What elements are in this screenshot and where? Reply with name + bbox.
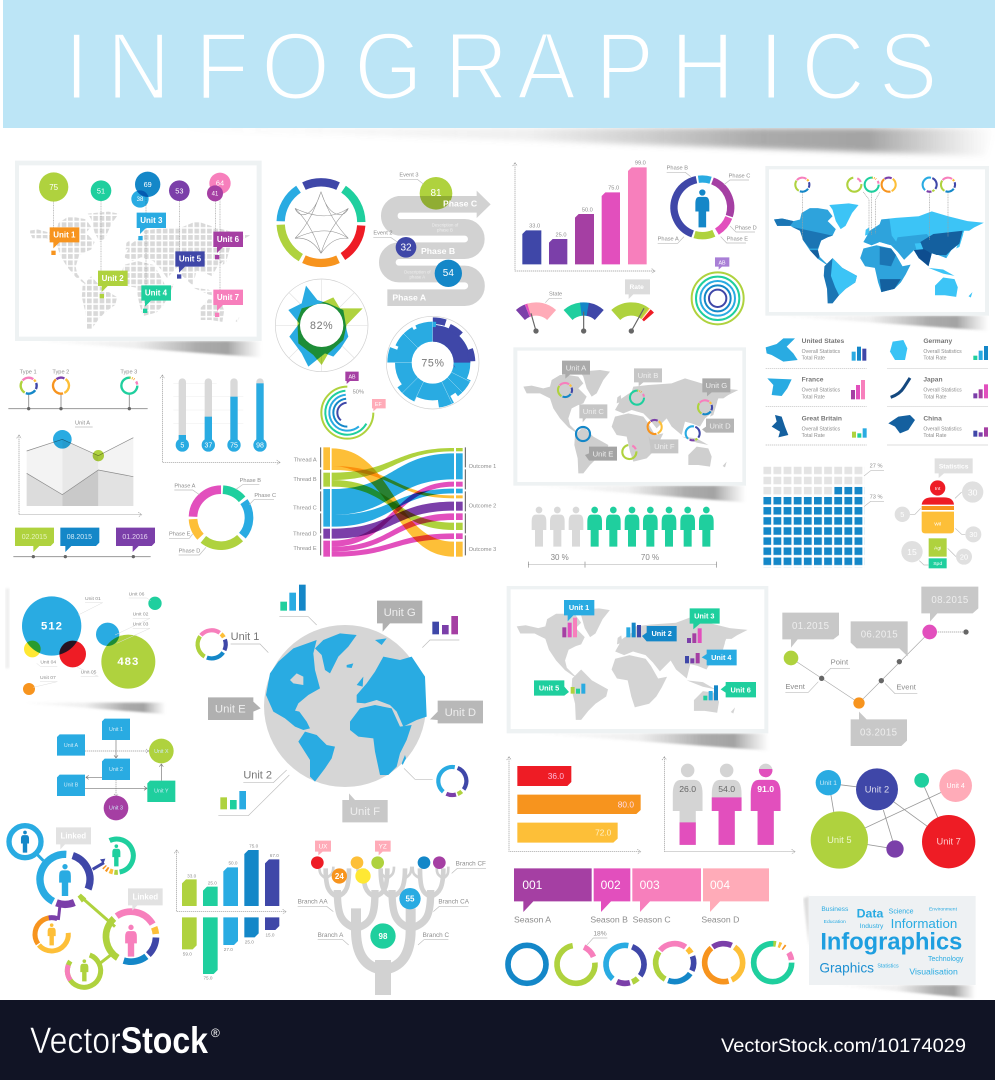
- chart: horizontal bars: [507, 757, 641, 854]
- footer bar: [0, 1000, 995, 1080]
- panel: dotted world map: 53: [175, 186, 183, 195]
- timeline: date path: 08.2015: [931, 595, 969, 606]
- diagram: branching tree: 55: [406, 895, 415, 904]
- chart: seasons: Season D: [701, 914, 739, 924]
- chart: overlapping bubbles: Unit 02: [133, 612, 149, 618]
- chart: sankey flows: Outcome 3: [469, 547, 496, 553]
- timeline: date path: 01.2015: [792, 621, 829, 632]
- chart: sankey flows: Thread B: [293, 477, 317, 483]
- panel: word cloud: Technology: [928, 956, 964, 963]
- panel: gray world map with units: Unit G: [705, 381, 727, 390]
- chart: phase cycle ring: Phase D: [179, 548, 200, 554]
- panel: country statistics: Total Rate: [802, 356, 825, 362]
- chart: person donut: Phase E: [727, 236, 748, 242]
- diagram: network bubbles: Unit 4: [947, 783, 965, 790]
- callout: Unit D: [430, 701, 483, 723]
- chart: diverging bars: [174, 844, 286, 981]
- panel: country statistics: Great Britain: [802, 415, 842, 422]
- panel: country statistics: Overall Statistics: [802, 349, 840, 355]
- chart: phase cycle ring: Phase E: [169, 532, 191, 538]
- chart: donut rings: [508, 930, 799, 991]
- chart: horizontal bars: 72.0: [595, 828, 612, 838]
- callout: Unit 7: [213, 290, 243, 317]
- chart: people bars: [662, 757, 795, 854]
- timeline: date path: Event: [785, 682, 806, 691]
- chart: phase serpentine: phase B: [437, 228, 453, 233]
- chart: statistics person: Spd: [933, 561, 942, 567]
- chart: person donut: Phase C: [729, 173, 750, 179]
- panel: country statistics: United States: [802, 338, 844, 345]
- chart: phase serpentine: 54: [443, 268, 454, 279]
- panel: word cloud: Information: [891, 916, 957, 931]
- chart: overlapping bubbles: Unit 06: [129, 591, 145, 597]
- timeline: types: Type 3: [120, 370, 137, 376]
- chart: overlapping bubbles: [5, 588, 166, 714]
- panel: world map with bar charts: Unit 5: [539, 684, 559, 693]
- panel: word cloud: Industry: [860, 923, 884, 930]
- panel: country statistics: Total Rate: [923, 356, 947, 362]
- chart: area: [17, 420, 142, 517]
- chart: sankey flows: Thread E: [293, 546, 317, 552]
- chart: statistics person: 30: [968, 487, 978, 497]
- chart: diverging bars: 67.0: [270, 853, 279, 858]
- panel: country statistics: Overall Statistics: [802, 426, 840, 432]
- callout: Unit 5: Unit 5: [179, 255, 202, 264]
- panel: blue world map: [765, 166, 989, 331]
- timeline: types: Type 2: [52, 370, 69, 376]
- chart: rising bars: 25.0: [555, 232, 567, 238]
- chart: chord ring: [265, 167, 377, 279]
- chart: gauges: [503, 279, 664, 365]
- footer link: VectorStock.com/10174029: [721, 1036, 966, 1057]
- diagram: network bubbles: [811, 768, 975, 869]
- panel: country statistics: [766, 338, 988, 445]
- chart: phase cycle ring: Phase A: [174, 483, 196, 489]
- callout: Unit 3: Unit 3: [140, 216, 163, 225]
- title banner: [3, 0, 995, 156]
- chart: seasons: 001: [522, 878, 543, 892]
- panel: gray world map with units: Unit F: [654, 442, 675, 451]
- globe: [192, 585, 483, 822]
- panel: gray world map with units: [513, 347, 746, 502]
- chart: diverging bars: 75.0: [249, 844, 259, 849]
- chart: seasons: Season B: [590, 914, 628, 924]
- chart: sankey flows: Thread A: [294, 457, 317, 463]
- chart: seasons: 003: [640, 878, 660, 892]
- timeline: dates: 08.2015: [67, 534, 92, 541]
- panel: dotted world map: 38: [137, 197, 144, 203]
- chart: people 30 / 70 percent: 70 %: [641, 553, 659, 562]
- chart: overlapping bubbles: 512: [41, 620, 63, 632]
- chart: sankey flows: [293, 447, 496, 557]
- panel: world map with bar charts: [507, 586, 769, 751]
- panel: country statistics: China: [923, 415, 942, 422]
- callout: Unit 2: Unit 2: [102, 274, 124, 283]
- panel: gray world map with units: Unit A: [566, 363, 587, 372]
- chart: diverging bars: 59.0: [183, 951, 192, 956]
- chart: statistics person: Agi: [934, 546, 941, 552]
- panel: word cloud: Environment: [929, 906, 958, 912]
- lower right quadrant: [507, 586, 978, 999]
- chart: overlapping bubbles: Unit 05: [81, 670, 97, 676]
- diagram: linked people: Linked: [60, 832, 86, 841]
- callout: Unit D: Unit D: [445, 707, 476, 719]
- callout: Unit 1: [50, 227, 79, 255]
- globe: Unit 1: [231, 631, 259, 643]
- chart: radar 82%: [275, 279, 368, 372]
- chart: people bars: 54.0: [718, 784, 735, 794]
- chart: phase serpentine: 81: [430, 188, 442, 199]
- panel: word cloud: Science: [889, 908, 914, 915]
- chart: diverging bars: 33.0: [187, 873, 197, 878]
- timeline: date path: 06.2015: [861, 630, 898, 641]
- panel: gray world map with units: Unit C: [583, 407, 604, 416]
- diagram: linked people: [9, 826, 166, 994]
- diagram: network bubbles: Unit 7: [936, 837, 961, 847]
- lower left quadrant: [5, 585, 486, 995]
- chart: overlapping bubbles: 483: [117, 656, 139, 668]
- chart: phase cycle ring: Phase B: [240, 478, 261, 484]
- diagram: network bubbles: Unit 5: [827, 835, 852, 845]
- timeline: types: Type 1: [20, 370, 37, 376]
- chart: seasons: 002: [601, 878, 621, 892]
- chart: overlapping bubbles: Unit 01: [85, 596, 101, 602]
- icon: person: [695, 189, 709, 227]
- panel: country statistics: Overall Statistics: [923, 388, 962, 394]
- chart: people 30 / 70 percent: 30 %: [551, 553, 569, 562]
- callout: Unit 7: Unit 7: [217, 293, 240, 302]
- panel: country statistics: Overall Statistics: [923, 349, 962, 355]
- callout: Unit 2: [98, 271, 128, 298]
- callout: Unit 4: Unit 4: [145, 289, 168, 298]
- upper left quadrant: [8, 161, 496, 558]
- chart: seasons: 004: [710, 878, 730, 892]
- diagram: branching tree: Branch AA: [298, 899, 328, 906]
- title: INFOGRAPHICS: [64, 13, 938, 120]
- timeline: dates: 02.2015: [22, 534, 47, 541]
- footer brand: VectorStock: [30, 1020, 208, 1061]
- chart: phase serpentine: 32: [400, 243, 412, 254]
- callout: Unit 3: [137, 213, 166, 240]
- timeline: date path: 03.2015: [860, 728, 897, 739]
- diagram: linked people: Linked: [132, 893, 158, 902]
- panel: gray world map with units: Unit E: [593, 449, 613, 458]
- chart: person donut: Phase D: [735, 225, 757, 231]
- upper right quadrant: [503, 161, 989, 568]
- chart: seasons: Season A: [514, 914, 551, 924]
- timeline: types: [8, 370, 148, 410]
- diagram: branching tree: UX: [319, 844, 328, 851]
- chart: statistics person: 5: [900, 510, 904, 519]
- callout: Unit G: [377, 601, 422, 632]
- chart: diverging bars: 75.0: [203, 976, 213, 981]
- chart: seasons: [514, 868, 769, 924]
- callout: Unit E: [208, 697, 261, 720]
- chart: statistics person: Statistics: [939, 463, 969, 470]
- panel: world map with bar charts: Unit 4: [711, 653, 732, 662]
- callout: Unit 6: [213, 232, 243, 259]
- chart: diverging bars: 15.0: [265, 932, 275, 937]
- chart: sunburst 75%: 75%: [421, 357, 445, 369]
- chart: phase cycle ring: Phase C: [254, 493, 276, 499]
- panel: country statistics: Japan: [923, 377, 943, 384]
- panel: country statistics: France: [802, 377, 824, 384]
- callout: Unit F: Unit F: [350, 806, 380, 818]
- chart: radial arcs 50%: 50%: [353, 390, 364, 396]
- chart: sankey flows: Outcome 1: [469, 464, 496, 470]
- chart: phase serpentine: Description of: [432, 223, 459, 228]
- chart: diverging bars: 50.0: [228, 861, 238, 866]
- panel: world map with bar charts: Unit 1: [569, 603, 589, 612]
- map: blue countries: [774, 203, 984, 303]
- panel: country statistics: Total Rate: [802, 433, 825, 439]
- chart: rising bars: 33.0: [529, 224, 540, 230]
- chart: statistics person: Wil: [934, 521, 941, 527]
- chart: waffle 27 / 73 percent: 27 %: [870, 464, 883, 470]
- diagram: branching tree: Branch CF: [456, 861, 486, 868]
- timeline: dates: [13, 528, 155, 558]
- chart: thermometers: 98: [256, 443, 264, 450]
- diagram: branching tree: 98: [379, 932, 388, 941]
- panel: dotted world map: 64: [216, 178, 224, 187]
- chart: radial arcs 50%: EF: [375, 402, 382, 408]
- chart: statistics person: 30: [969, 530, 977, 539]
- chart: rising bars: 75.0: [608, 186, 619, 192]
- panel: country statistics: Overall Statistics: [923, 426, 962, 432]
- panel: word cloud: [803, 896, 976, 999]
- panel: country statistics: Total Rate: [802, 394, 825, 400]
- chart: person donut: [658, 166, 757, 245]
- chart: gauges: State: [549, 292, 562, 298]
- chart: thermometers: [160, 375, 280, 465]
- timeline: date path: Event: [896, 683, 917, 692]
- panel: word cloud: Education: [824, 919, 846, 925]
- panel: world map with bar charts: Unit 2: [651, 629, 672, 638]
- chart: donut rings: 18%: [593, 930, 607, 937]
- panel: word cloud: Data: [857, 907, 884, 921]
- chart: horizontal bars: 80.0: [618, 799, 634, 809]
- panel: dotted world map: 75: [49, 183, 59, 192]
- panel: country statistics: Overall Statistics: [802, 388, 840, 394]
- panel: world map with bar charts: Unit 6: [730, 685, 751, 694]
- chart: diverging bars: 25.0: [245, 939, 254, 944]
- panel: country statistics: Germany: [923, 338, 952, 345]
- chart: gauges: Rate: [629, 284, 644, 291]
- timeline: date path: Point: [831, 658, 849, 667]
- panel: dotted world map: [15, 161, 262, 357]
- chart: sankey flows: Thread D: [293, 531, 317, 537]
- chart: phase serpentine: phase A: [410, 274, 425, 279]
- chart: waffle 27 / 73 percent: 73 %: [870, 495, 883, 501]
- chart: phase serpentine: Event 3: [399, 173, 419, 179]
- diagram: network bubbles: Unit 1: [820, 780, 837, 787]
- callout: Unit E: Unit E: [215, 704, 246, 716]
- chart: overlapping bubbles: Unit 04: [40, 660, 56, 666]
- panel: dotted world map: 51: [97, 186, 105, 195]
- callout: Unit G: Unit G: [384, 607, 416, 619]
- flowchart: Unit 3: [109, 806, 123, 812]
- chart: thermometers: 37: [204, 443, 212, 450]
- chart: diverging bars: 27.0: [224, 947, 233, 952]
- panel: world map with bar charts: Unit 3: [694, 611, 715, 620]
- chart: person donut: Phase B: [667, 166, 688, 172]
- flowchart: Unit B: [64, 783, 79, 789]
- chart: people bars: 26.0: [679, 784, 696, 794]
- panel: country statistics: Total Rate: [923, 394, 947, 400]
- chart: diverging bars: 25.0: [208, 880, 217, 885]
- chart: overlapping bubbles: Unit 03: [133, 622, 149, 628]
- diagram: branching tree: [298, 841, 486, 995]
- flowchart: Unit A: [64, 743, 79, 749]
- chart: rising bars: 50.0: [582, 207, 593, 213]
- chart: statistics person: 15: [907, 547, 917, 557]
- flowchart: Unit 2: [109, 767, 123, 773]
- panel: word cloud: Statistics: [877, 963, 899, 969]
- chart: phase serpentine: [373, 173, 491, 302]
- diagram: branching tree: Branch A: [318, 932, 344, 939]
- chart: statistics person: Int: [935, 486, 941, 492]
- panel: word cloud: Business: [821, 906, 849, 913]
- panel: word cloud: Graphics: [819, 961, 874, 976]
- chart: people 30 / 70 percent: [528, 507, 717, 568]
- timeline: dates: 01.2016: [122, 534, 148, 541]
- diagram: branching tree: Branch C: [423, 932, 449, 939]
- chart: overlapping bubbles: Unit 07: [40, 675, 56, 681]
- chart: thermometers: 75: [230, 443, 238, 450]
- panel: gray world map with units: Unit B: [638, 371, 658, 380]
- diagram: network bubbles: Unit 2: [865, 784, 889, 794]
- panel: gray world map with units: Unit D: [709, 421, 731, 430]
- chart: area: Unit A: [75, 420, 90, 426]
- chart: person donut: Phase A: [658, 237, 679, 243]
- chart: concentric rings: [692, 257, 744, 324]
- callout: Unit 1: Unit 1: [53, 231, 76, 240]
- chart: phase serpentine: Description of: [404, 269, 431, 274]
- globe: Unit 2: [243, 769, 272, 781]
- chart: statistics person: [895, 458, 983, 568]
- chart: concentric rings: AB: [718, 260, 726, 266]
- chart: phase cycle ring: [169, 478, 276, 557]
- chart: rising bars: 99.0: [635, 161, 646, 167]
- chart: rising bars: [513, 161, 655, 273]
- chart: sankey flows: Outcome 2: [469, 504, 496, 510]
- panel: dotted world map: 41: [212, 191, 219, 197]
- flowchart: [57, 719, 175, 820]
- callout: Unit 5: [175, 251, 205, 279]
- chart: thermometers: 5: [180, 443, 184, 450]
- chart: radial arcs 50%: [317, 372, 386, 443]
- panel: country statistics: Total Rate: [923, 433, 947, 439]
- chart: sankey flows: Thread C: [293, 505, 317, 511]
- chart: radial arcs 50%: AB: [348, 375, 356, 381]
- chart: horizontal bars: 36.0: [548, 771, 564, 781]
- flowchart: Unit Y: [154, 789, 169, 795]
- callout: Unit F: [342, 793, 388, 822]
- chart: radar 82%: 82%: [310, 320, 333, 332]
- diagram: branching tree: Branch CA: [438, 899, 470, 906]
- icons: rings: [792, 175, 958, 195]
- flowchart: Unit 1: [109, 727, 123, 733]
- chart: people bars: 91.0: [757, 784, 774, 794]
- panel: word cloud: Infographics: [820, 929, 962, 955]
- footer bar: ®: [211, 1026, 220, 1040]
- flowchart: Unit X: [154, 749, 169, 755]
- timeline: date path: [782, 587, 978, 746]
- diagram: branching tree: YZ: [379, 844, 387, 851]
- chart: seasons: Season C: [633, 914, 671, 924]
- callout: Unit 6: Unit 6: [217, 235, 240, 244]
- chart: waffle 27 / 73 percent: [763, 464, 884, 568]
- chart: phase serpentine: Phase C: [443, 199, 478, 209]
- chart: sunburst 75%: [378, 308, 488, 418]
- chart: statistics person: 20: [960, 552, 968, 561]
- panel: dotted world map: 69: [144, 180, 152, 189]
- chart: phase serpentine: Phase A: [392, 292, 427, 302]
- panel: word cloud: Visualisation: [909, 967, 958, 977]
- chart: phase serpentine: Phase B: [421, 246, 455, 256]
- diagram: branching tree: 24: [335, 872, 344, 881]
- chart: phase serpentine: Event 2: [373, 231, 393, 237]
- callout: Unit 4: [141, 285, 171, 313]
